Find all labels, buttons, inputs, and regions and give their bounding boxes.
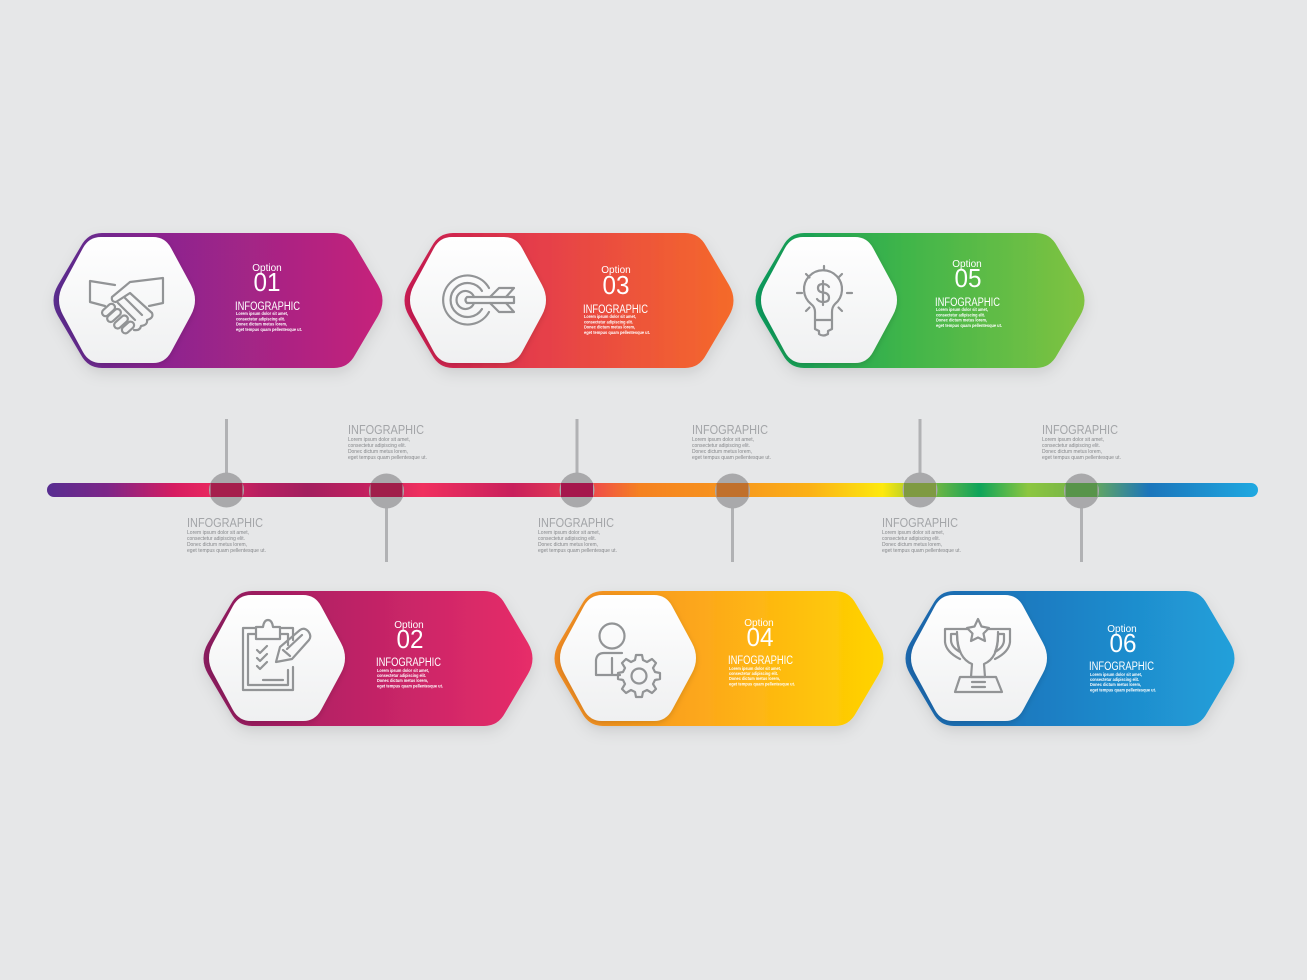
text block 03: Donec dictum metus lorem, <box>584 324 636 330</box>
card shape 03 <box>404 233 734 368</box>
timeline label 3 <box>538 516 617 554</box>
timeline label 4: consectetur adipiscing elit. <box>692 443 750 449</box>
timeline label 4 <box>692 423 771 461</box>
panel: option 03 <box>404 233 734 368</box>
timeline label 2: eget tempus quam pellentesque ut. <box>348 455 427 461</box>
timeline bar <box>47 483 1258 497</box>
panel: option 02 <box>204 591 532 726</box>
timeline label 2: Donec dictum metus lorem, <box>348 449 408 455</box>
text block 02: Lorem ipsum dolor sit amet, <box>377 668 430 674</box>
panel: option 06 <box>906 591 1234 726</box>
text block 06: consectetur adipiscing elit. <box>1090 677 1139 683</box>
text block 05 <box>935 259 1003 329</box>
panel: option 05 <box>756 233 1084 368</box>
text block 01: Option <box>252 263 282 274</box>
text block 02: Donec dictum metus lorem, <box>377 678 429 684</box>
text block 03: Option <box>601 265 631 276</box>
marker 2 <box>369 474 404 508</box>
icon: trophy with star <box>945 619 1010 692</box>
card shape 06 <box>906 591 1234 726</box>
marker 5 <box>902 472 938 508</box>
timeline label 1: eget tempus quam pellentesque ut. <box>187 548 266 554</box>
text block 01: INFOGRAPHIC <box>235 301 300 313</box>
panel: option 04 <box>554 591 884 726</box>
text block 02: consectetur adipiscing elit. <box>377 673 426 679</box>
text block 01 <box>235 263 303 333</box>
timeline label 6: consectetur adipiscing elit. <box>1042 443 1100 449</box>
white hexagon 01 <box>59 237 195 363</box>
text block 01: consectetur adipiscing elit. <box>236 316 285 322</box>
text block 02 <box>376 620 444 690</box>
icon: person with gear <box>596 624 660 697</box>
text block 02: 02 <box>396 624 424 654</box>
text block 05: consectetur adipiscing elit. <box>936 312 985 318</box>
white hexagon 03 <box>410 237 546 363</box>
timeline label 1: INFOGRAPHIC <box>187 516 263 530</box>
text block 05: INFOGRAPHIC <box>935 297 1000 309</box>
text block 01: eget tempus quam pellentesque ut. <box>236 327 303 333</box>
card shape 02 <box>204 591 532 726</box>
timeline label 6: Lorem ipsum dolor sit amet, <box>1042 437 1104 443</box>
text block 06: eget tempus quam pellentesque ut. <box>1090 688 1157 694</box>
text block 06: 06 <box>1110 628 1136 658</box>
text block 02: Option <box>394 620 424 631</box>
stem 5 <box>918 419 922 474</box>
white hexagon 05 <box>761 237 897 363</box>
text block 02: INFOGRAPHIC <box>376 657 441 669</box>
marker 3 <box>560 472 594 508</box>
icon: handshake <box>90 278 163 335</box>
text block 04: 04 <box>746 622 774 652</box>
timeline label 4: Donec dictum metus lorem, <box>692 449 752 455</box>
text block 04: eget tempus quam pellentesque ut. <box>729 682 796 688</box>
text block 06: Option <box>1107 624 1137 635</box>
text block 02: eget tempus quam pellentesque ut. <box>377 684 444 690</box>
card shape 01 <box>54 233 382 368</box>
timeline label 5 <box>882 516 961 554</box>
white hexagon 06 <box>911 595 1047 721</box>
white hexagon 02 <box>209 595 345 721</box>
stem 6 <box>1080 507 1083 562</box>
timeline label 6 <box>1042 423 1121 461</box>
text block 04: Donec dictum metus lorem, <box>729 676 781 682</box>
timeline label 3: eget tempus quam pellentesque ut. <box>538 548 617 554</box>
timeline label 3: Lorem ipsum dolor sit amet, <box>538 530 600 536</box>
timeline label 6: Donec dictum metus lorem, <box>1042 449 1102 455</box>
icon: light bulb with dollar <box>797 266 852 336</box>
marker 6 <box>1064 474 1099 508</box>
stem 4 <box>731 507 734 562</box>
text block 05: Lorem ipsum dolor sit amet, <box>936 307 989 313</box>
text block 05: Donec dictum metus lorem, <box>936 318 988 324</box>
text block 06 <box>1089 624 1157 694</box>
timeline label 5: Lorem ipsum dolor sit amet, <box>882 530 944 536</box>
timeline label 1: Donec dictum metus lorem, <box>187 542 247 548</box>
timeline label 1: Lorem ipsum dolor sit amet, <box>187 530 249 536</box>
text block 03: eget tempus quam pellentesque ut. <box>584 330 651 336</box>
text block 04: Lorem ipsum dolor sit amet, <box>729 666 782 672</box>
timeline label 2 <box>348 423 427 461</box>
timeline label 5: Donec dictum metus lorem, <box>882 542 942 548</box>
timeline label 1 <box>187 516 266 554</box>
text block 01: 01 <box>254 267 280 297</box>
timeline label 2: INFOGRAPHIC <box>348 423 424 437</box>
timeline label 2: consectetur adipiscing elit. <box>348 443 406 449</box>
text block 03: Lorem ipsum dolor sit amet, <box>584 314 637 320</box>
card shape 04 <box>554 591 884 726</box>
text block 05: 05 <box>954 263 982 293</box>
timeline label 3: consectetur adipiscing elit. <box>538 536 596 542</box>
text block 04: INFOGRAPHIC <box>728 655 793 667</box>
timeline label 5: eget tempus quam pellentesque ut. <box>882 548 961 554</box>
text block 03: INFOGRAPHIC <box>583 304 648 316</box>
timeline label 6: INFOGRAPHIC <box>1042 423 1118 437</box>
text block 04: Option <box>744 618 774 629</box>
white hexagon 04 <box>560 595 696 721</box>
panel: option 01 <box>54 233 382 368</box>
timeline label 4: INFOGRAPHIC <box>692 423 768 437</box>
text block 03 <box>583 265 651 336</box>
text block 03: 03 <box>602 270 630 300</box>
timeline label 5: consectetur adipiscing elit. <box>882 536 940 542</box>
marker 4 <box>715 474 750 508</box>
timeline label 3: Donec dictum metus lorem, <box>538 542 598 548</box>
card shape 05 <box>756 233 1084 368</box>
text block 03: consectetur adipiscing elit. <box>584 320 633 326</box>
timeline label 3: INFOGRAPHIC <box>538 516 614 530</box>
stem 2 <box>385 507 388 562</box>
stem 3 <box>576 419 578 474</box>
icon: target with arrow <box>443 276 514 324</box>
stem 1 <box>225 419 228 474</box>
timeline label 1: consectetur adipiscing elit. <box>187 536 245 542</box>
text block 01: Lorem ipsum dolor sit amet, <box>236 311 289 317</box>
icon: clipboard with pen <box>243 620 310 690</box>
timeline label 4: eget tempus quam pellentesque ut. <box>692 455 771 461</box>
timeline label 2: Lorem ipsum dolor sit amet, <box>348 437 410 443</box>
text block 05: eget tempus quam pellentesque ut. <box>936 323 1003 329</box>
text block 04: consectetur adipiscing elit. <box>729 671 778 677</box>
text block 05: Option <box>952 259 982 270</box>
marker 1 <box>209 472 244 508</box>
text block 01: Donec dictum metus lorem, <box>236 322 288 328</box>
timeline label 5: INFOGRAPHIC <box>882 516 958 530</box>
timeline label 6: eget tempus quam pellentesque ut. <box>1042 455 1121 461</box>
text block 06: Lorem ipsum dolor sit amet, <box>1090 672 1143 678</box>
timeline label 4: Lorem ipsum dolor sit amet, <box>692 437 754 443</box>
text block 06: Donec dictum metus lorem, <box>1090 682 1142 688</box>
text block 06: INFOGRAPHIC <box>1089 661 1154 673</box>
text block 04 <box>728 618 796 688</box>
